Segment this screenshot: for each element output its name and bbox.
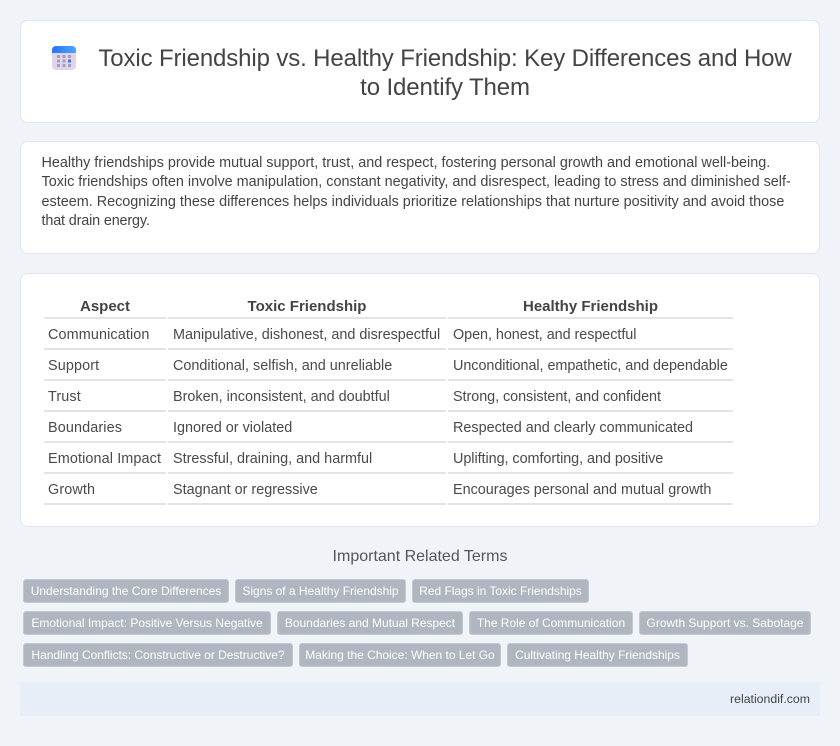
tag [23, 611, 271, 635]
tag: Signs of a Healthy Friendship [242, 584, 399, 598]
icon: calendar [52, 46, 76, 70]
footer source: relationdif.com [730, 692, 810, 706]
tag: Cultivating Healthy Friendships [515, 648, 680, 662]
tag [469, 611, 633, 635]
tag [639, 611, 811, 635]
panel: comparison table: Manipulative, dishonest, and disrespectful [173, 327, 440, 343]
text block: introduction [42, 154, 791, 229]
tag [23, 643, 293, 667]
tag: Making the Choice: When to Let Go [305, 648, 495, 662]
panel: comparison table: Respected and clearly communicated [453, 420, 693, 436]
row: trust: Trust [48, 389, 81, 405]
tags: related terms [23, 579, 811, 667]
text block: introduction: Healthy friendships provide mutual support, trust, and respect, fostering personal growth and emotional well-being. [42, 154, 770, 170]
panel: comparison table: Encourages personal and mutual growth [453, 482, 711, 498]
panel: comparison table: Healthy Friendship [523, 298, 658, 315]
panel: introduction [20, 141, 820, 254]
panel: comparison table: Broken, inconsistent, and doubtful [173, 389, 390, 405]
panel: comparison table: Uplifting, comforting, and positive [453, 451, 663, 467]
text block: introduction: Toxic friendships often involve manipulation, constant negativity, and disrespect, leading to stress and diminished self- [42, 174, 791, 190]
tag [412, 579, 589, 603]
tag [299, 643, 501, 667]
tag [507, 643, 688, 667]
panel: comparison table [20, 273, 820, 527]
tag: Boundaries and Mutual Respect [285, 616, 455, 630]
title [98, 45, 792, 101]
heading: related terms: Important Related Terms [333, 548, 507, 565]
panel: comparison table: Ignored or violated [173, 420, 292, 436]
text block: introduction: that drain energy. [42, 213, 150, 229]
row: emotional impact: Emotional Impact [48, 451, 161, 467]
panel: comparison table: Open, honest, and respectful [453, 327, 636, 343]
tag [235, 579, 406, 603]
tag: Red Flags in Toxic Friendships [419, 584, 582, 598]
row: growth: Growth [48, 482, 95, 498]
panel: comparison table: Strong, consistent, and confident [453, 389, 661, 405]
row: boundaries: Boundaries [48, 420, 122, 436]
title: Toxic Friendship vs. Healthy Friendship: Key Differences and How [98, 45, 792, 72]
row: communication: Communication [48, 327, 150, 343]
tag [277, 611, 463, 635]
panel: comparison table: Stagnant or regressive [173, 482, 318, 498]
panel: title card [20, 20, 820, 123]
panel: comparison table: Conditional, selfish, and unreliable [173, 358, 392, 374]
panel: comparison table: Unconditional, empathetic, and dependable [453, 358, 728, 374]
tag: Handling Conflicts: Constructive or Destructive? [31, 648, 285, 662]
text block: introduction: esteem. Recognizing these differences helps individuals prioritize relationships that nurture positivity and avoid those [42, 194, 784, 210]
panel: comparison table: Toxic Friendship [248, 298, 366, 315]
table header: Aspect [80, 298, 130, 315]
row: support: Support [48, 358, 99, 374]
panel: comparison table: Stressful, draining, and harmful [173, 451, 372, 467]
tag: The Role of Communication [477, 616, 625, 630]
tag: Growth Support vs. Sabotage [647, 616, 803, 630]
tag: Emotional Impact: Positive Versus Negative [31, 616, 263, 630]
footer bar [20, 682, 820, 716]
title: to Identify Them [360, 74, 530, 101]
tag: Understanding the Core Differences [31, 584, 221, 598]
tag [23, 579, 229, 603]
